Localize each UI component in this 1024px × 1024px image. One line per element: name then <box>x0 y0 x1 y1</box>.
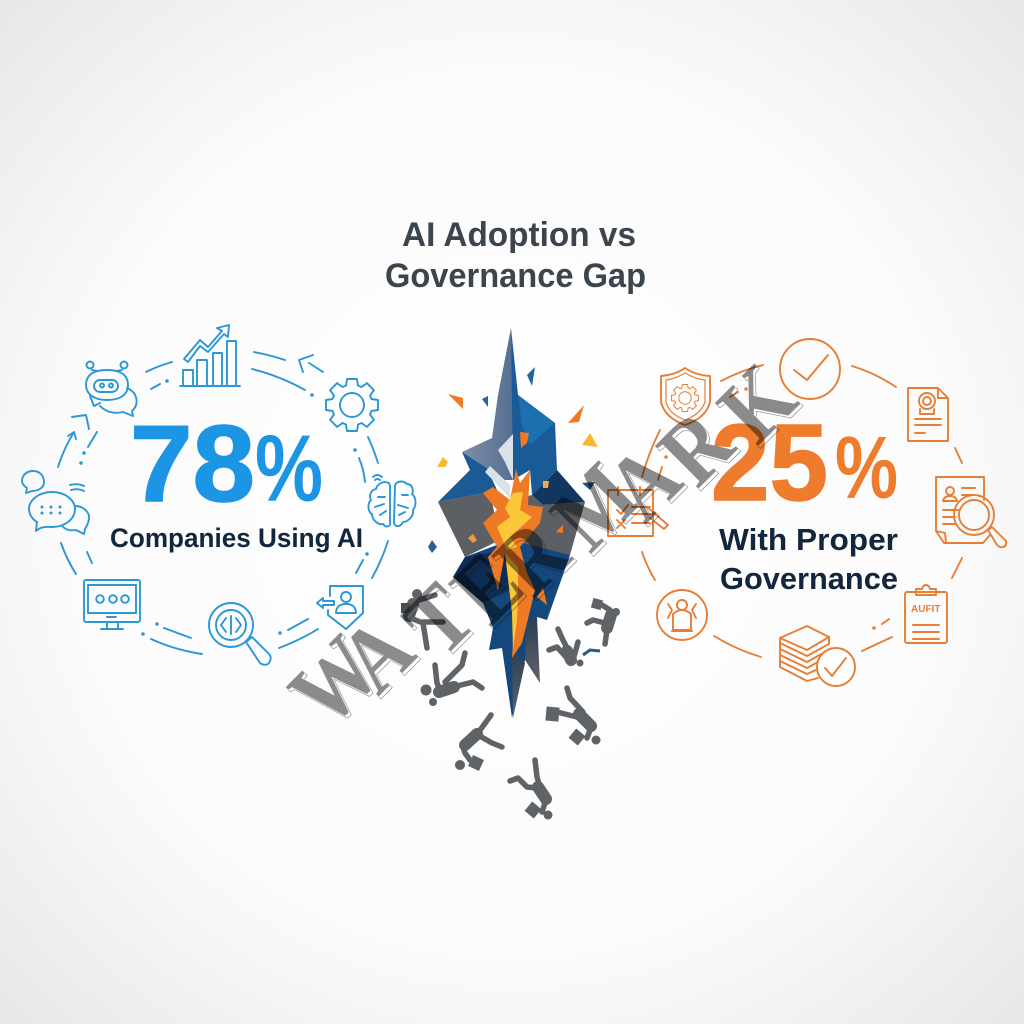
icon: user shield <box>317 586 363 629</box>
crack: dark tips <box>525 617 540 683</box>
watermark: R <box>475 500 589 614</box>
watermark: M <box>534 446 660 572</box>
central crack explosion <box>428 328 598 718</box>
stat: 78%: 78 <box>130 403 255 525</box>
crack: grey left <box>438 492 500 557</box>
watermark: K <box>701 347 818 464</box>
figure 1 <box>401 589 443 648</box>
icon: check circle <box>780 339 840 399</box>
icon: checklist magnifier <box>608 487 668 536</box>
crack: white shards <box>485 434 513 498</box>
watermark <box>270 345 818 748</box>
label: with proper governance <box>719 522 898 596</box>
icon: gear shield <box>661 368 710 425</box>
watermark: A <box>322 600 436 714</box>
watermark: W <box>272 619 401 748</box>
crack: grey right <box>510 495 585 555</box>
watermark: K <box>699 345 815 461</box>
title <box>385 216 646 295</box>
figure 4 <box>545 688 600 745</box>
crack: yellow core <box>497 492 532 550</box>
panel: companies using AI <box>22 325 416 665</box>
watermark: A <box>589 428 703 542</box>
dashed ring: governance <box>642 365 962 657</box>
flying shards <box>428 367 598 605</box>
crack: orange burst <box>483 469 543 658</box>
crack: blue upper column <box>511 328 557 495</box>
crack: navy right <box>532 470 585 505</box>
watermark: T <box>386 566 497 677</box>
label: with proper governance: Governance <box>720 561 898 596</box>
icon: certificate document <box>908 388 948 441</box>
title: AI Adoption vs <box>402 216 636 254</box>
icon: growth chart <box>180 325 240 386</box>
figure 2 <box>420 653 482 706</box>
falling people <box>401 589 620 820</box>
stat: 25%: 25 <box>711 402 828 524</box>
icon: audit clipboard <box>905 585 947 643</box>
title: Governance Gap <box>385 257 646 295</box>
icon: chat bubbles <box>22 471 89 534</box>
watermark: W <box>270 616 399 745</box>
icon: CV review <box>936 477 1006 547</box>
crack: grey top left <box>462 328 513 480</box>
panel: proper governance <box>608 339 1006 686</box>
label: companies using AI: Companies Using AI <box>110 523 363 553</box>
icon: AI magnifier <box>209 603 271 665</box>
stat: 25%: % <box>835 418 898 517</box>
crack: blue left <box>438 452 497 502</box>
watermark: E <box>432 532 542 642</box>
icon: people circle <box>657 590 707 640</box>
figure 5 <box>510 760 552 820</box>
figure 3 <box>455 715 502 771</box>
stat: 25% <box>711 402 898 524</box>
icon: robot chat <box>86 362 137 416</box>
watermark: R <box>641 392 756 507</box>
watermark: A <box>320 598 433 711</box>
figure 6 <box>587 598 620 644</box>
watermark: T <box>384 564 494 674</box>
icon: brain <box>368 475 416 526</box>
watermark: E <box>434 534 545 645</box>
watermark: A <box>587 426 700 539</box>
crack: lower navy <box>453 540 570 718</box>
watermark: M <box>532 443 658 569</box>
watermark: R <box>639 390 753 504</box>
icon: monitor <box>84 580 140 629</box>
dashed ring: adoption <box>58 352 388 654</box>
label: with proper governance: With Proper <box>719 522 898 557</box>
stat: 78% <box>130 403 323 525</box>
figure 7 <box>549 629 600 666</box>
icon: gear <box>326 379 378 431</box>
icon: audit clipboard: AUFIT <box>911 604 940 615</box>
icon: document stack check <box>780 626 855 686</box>
stat: 78%: % <box>255 416 323 522</box>
watermark: R <box>477 502 592 617</box>
